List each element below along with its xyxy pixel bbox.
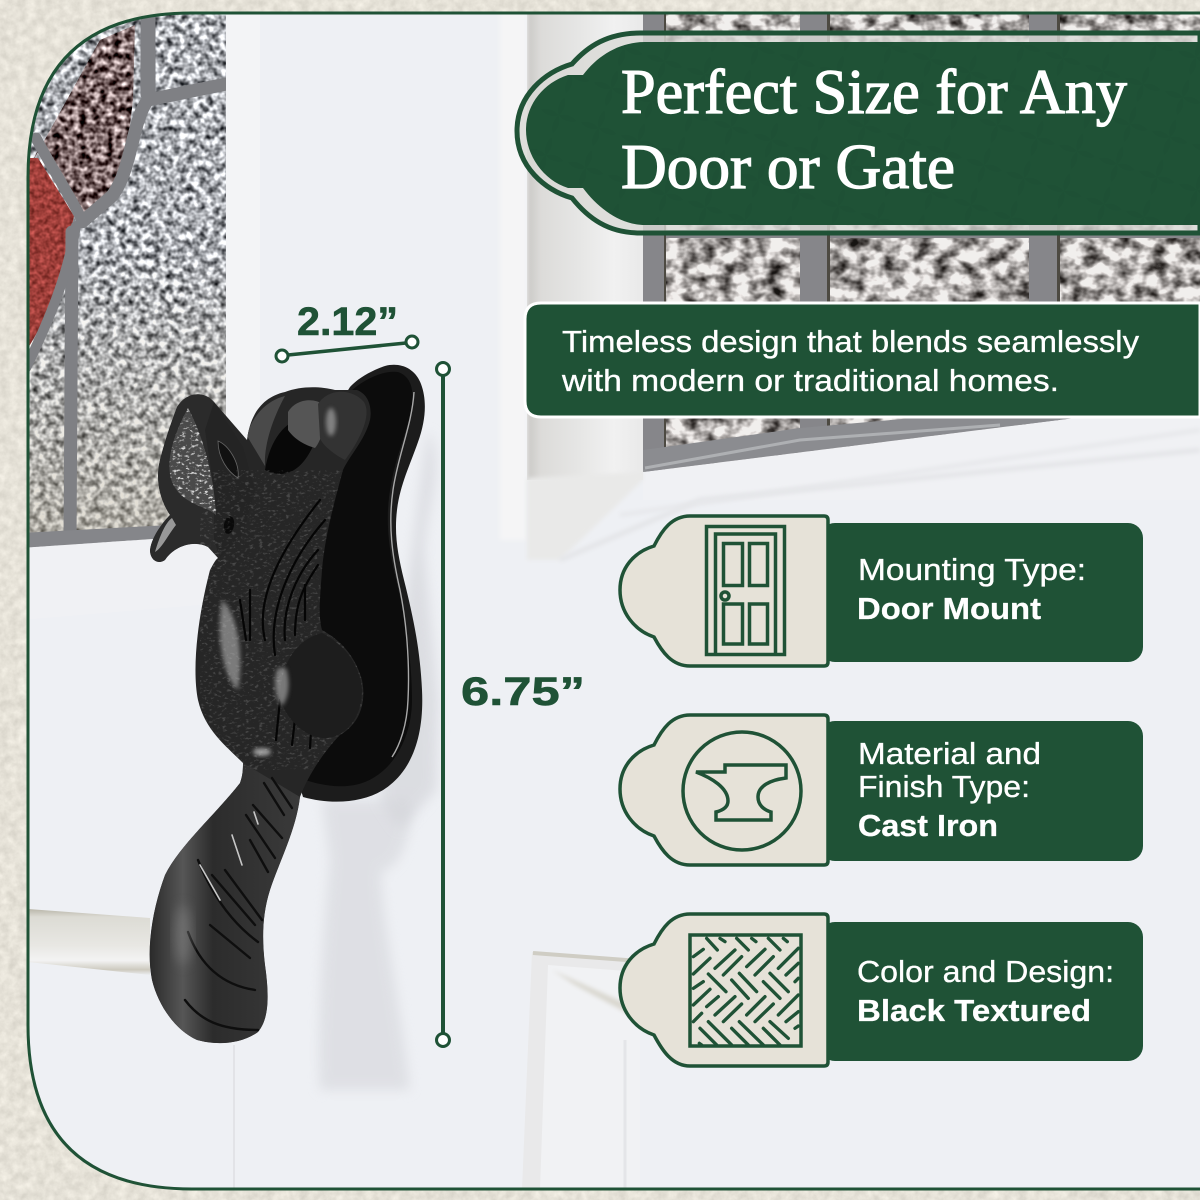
ear hole <box>224 516 234 534</box>
left window with stained glass <box>30 14 226 548</box>
lower right door panel moulding <box>522 952 640 1189</box>
tab <box>620 516 828 666</box>
fur strokes <box>240 500 328 748</box>
card text: Cast Iron <box>858 808 998 843</box>
card text: Color and Design: <box>857 954 1114 989</box>
height dimension 6.75: 6.75” <box>461 670 585 714</box>
ring cylinder <box>288 400 320 448</box>
head shape <box>150 394 214 562</box>
eye <box>218 441 238 478</box>
card text: Material and <box>858 736 1041 771</box>
title text <box>621 57 1127 202</box>
ring ear flap <box>247 396 285 466</box>
title text: Perfect Size for Any <box>621 57 1127 127</box>
tab <box>620 715 828 865</box>
squirrel body silhouette <box>150 387 371 1043</box>
description box: with modern or traditional homes. <box>561 363 1059 398</box>
icon: door <box>706 526 784 654</box>
card text <box>858 736 1041 843</box>
ring hole <box>265 425 312 474</box>
far ear plane <box>214 402 215 403</box>
tail highlights <box>200 812 258 900</box>
fur speckle <box>200 470 370 770</box>
plate edge highlight <box>391 392 414 757</box>
icon: anvil <box>683 732 801 850</box>
card text <box>857 552 1086 626</box>
chest highlight <box>220 600 240 690</box>
feature card: material and finish <box>620 715 1143 865</box>
knocker shadow on door <box>319 430 438 1090</box>
thin vertical pull wire <box>234 1045 235 1188</box>
tab <box>620 914 828 1066</box>
right leaded window <box>643 0 1200 500</box>
feature card: color and design <box>620 914 1143 1066</box>
waist highlight <box>253 748 271 756</box>
width dimension 2.12: 2.12” <box>297 300 398 344</box>
squirrel knocker <box>150 365 425 1043</box>
snout highlight <box>155 518 176 552</box>
description box <box>525 303 1200 417</box>
title banner <box>517 33 1200 233</box>
width dimension 2.12 <box>276 300 418 362</box>
knocker back plate <box>302 364 425 802</box>
card text: Door Mount <box>857 591 1041 626</box>
height dimension 6.75 <box>436 362 585 1046</box>
card text: Finish Type: <box>858 769 1030 804</box>
card text: Mounting Type: <box>858 552 1086 587</box>
door rail below left window <box>30 539 211 550</box>
icon: textured pattern <box>690 935 801 1046</box>
card text: Black Textured <box>857 993 1091 1028</box>
door frame beside right window <box>527 0 643 480</box>
lower left door moulding <box>28 909 150 975</box>
lower left door panel edge <box>114 1100 122 1189</box>
arm paw <box>318 392 367 460</box>
description box: Timeless design that blends seamlessly <box>562 324 1140 359</box>
tail shading <box>150 763 300 1043</box>
bevelled rail under right window <box>528 450 1197 560</box>
head highlight <box>169 408 216 515</box>
tail grooves <box>185 778 292 1030</box>
haunch <box>280 633 362 738</box>
plate front face <box>308 372 412 786</box>
card text <box>857 954 1114 1028</box>
title text: Door or Gate <box>621 132 955 202</box>
feature card: mounting type <box>620 516 1143 666</box>
